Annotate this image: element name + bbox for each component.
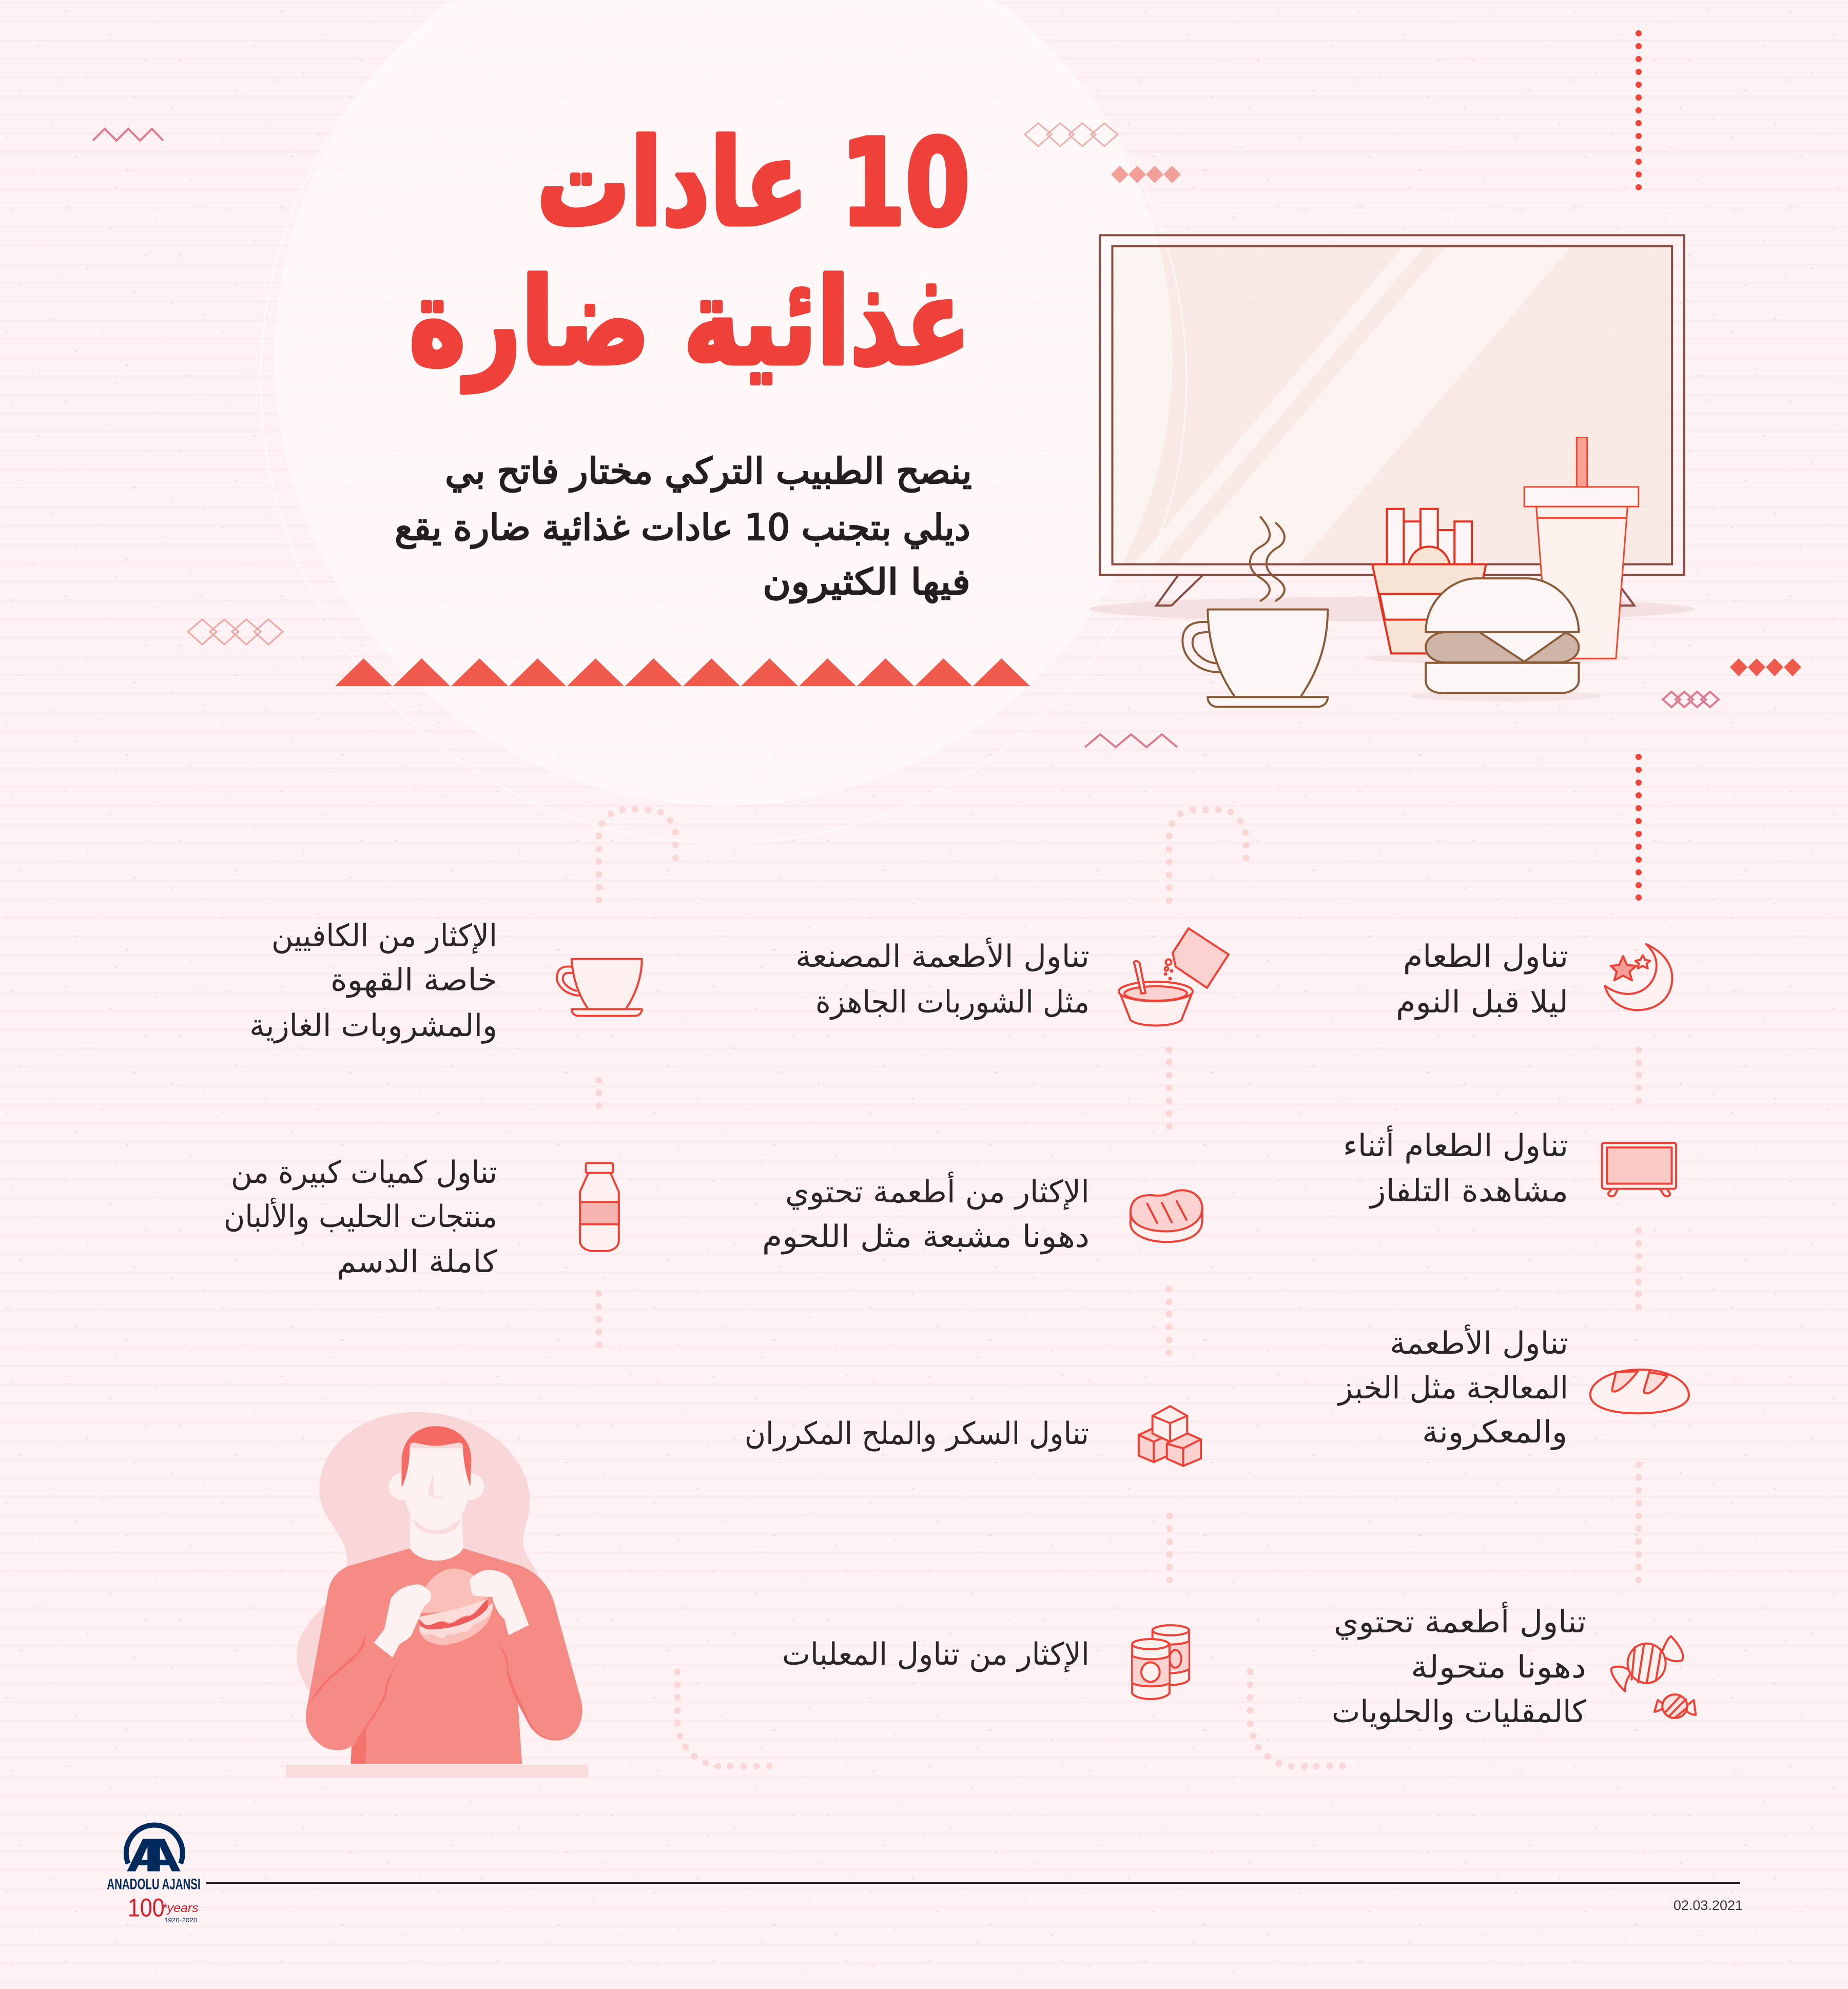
coffee cup [1182, 517, 1328, 707]
dotted connector: left arc [595, 806, 678, 903]
large pale circle behind headline [261, 0, 1186, 843]
habit: trans fats, fried foods and sweets: كالمقليات والحلويات [1332, 1694, 1586, 1730]
habit: trans fats, fried foods and sweets [1332, 1602, 1696, 1730]
icon: moon and stars [1605, 944, 1672, 1010]
icon: milk bottle [580, 1163, 619, 1251]
illustration: tv with snacks [1100, 235, 1684, 707]
habit: processed foods and ready soups [795, 928, 1229, 1025]
date: 02.03.2021 [1674, 1898, 1743, 1913]
triangle row [335, 658, 1030, 686]
100 years mark: 100 [128, 1893, 165, 1922]
tv frame [1100, 235, 1684, 606]
habit: eating while watching tv: مشاهدة التلفاز [1369, 1173, 1568, 1209]
head and neck [388, 1426, 484, 1561]
intro paragraph [395, 450, 972, 603]
intro paragraph: فيها الكثيرون [763, 561, 970, 603]
habit: too much caffeine: خاصة القهوة [330, 962, 497, 998]
logo letters [127, 1839, 181, 1871]
habit: too much caffeine [249, 918, 642, 1044]
zigzag top left [93, 129, 163, 141]
zigzag lower right [1085, 734, 1177, 747]
habit: processed foods and ready soups: مثل الشوربات الجاهزة [815, 984, 1090, 1020]
dotted connector: middle arc [1166, 807, 1249, 904]
habit: full-fat dairy: تناول كميات كبيرة من [231, 1155, 497, 1191]
drink cup [1524, 437, 1639, 658]
logo arc [126, 1825, 183, 1864]
100 years mark: 1920-2020 [164, 1917, 198, 1924]
french fries [1372, 509, 1486, 653]
dotted connector: bottom right corner [1247, 1669, 1346, 1769]
icon: candies [1611, 1636, 1696, 1718]
habit: eating while watching tv: تناول الطعام أثناء [1343, 1125, 1568, 1164]
100 years mark [128, 1893, 199, 1924]
habit: full-fat dairy [224, 1155, 619, 1280]
habit: refined sugar and salt: تناول السكر والملح المكرران [745, 1416, 1089, 1452]
icon: sugar cubes [1139, 1406, 1201, 1466]
sleeve shading [309, 1625, 561, 1764]
outline diamonds right [1663, 692, 1719, 707]
intro paragraph: ديلي بتجنب 10 عادات غذائية ضارة يقع [395, 506, 970, 549]
habit: eating while watching tv [1343, 1125, 1676, 1209]
habit: saturated fats such as meat: الإكثار من أطعمة تحتوي [785, 1172, 1090, 1210]
habit: processed foods such as bread and pasta: المعالجة مثل الخبز [1337, 1370, 1568, 1406]
habit: saturated fats such as meat [762, 1172, 1202, 1255]
icon: cans [1132, 1625, 1189, 1699]
icon: steak [1131, 1190, 1202, 1242]
habit: eating late at night: ليلا قبل النوم [1396, 984, 1568, 1020]
habit: saturated fats such as meat: دهونا مشبعة مثل اللحوم [762, 1219, 1090, 1255]
habit: trans fats, fried foods and sweets: دهونا متحولة [1411, 1649, 1586, 1685]
habit: processed foods such as bread and pasta: والمعكرونة [1422, 1414, 1567, 1450]
filled diamonds right [1730, 658, 1801, 676]
icon: cup [557, 959, 642, 1016]
habit: processed foods and ready soups: تناول الأطعمة المصنعة [795, 938, 1090, 974]
title: 10 عادات [537, 114, 970, 252]
illustration: man eating a burger [297, 1412, 582, 1764]
habit: eating late at night: تناول الطعام [1403, 939, 1568, 974]
red dotted line middle [1636, 754, 1642, 901]
habit: refined sugar and salt [745, 1406, 1201, 1466]
outline diamonds left [188, 619, 283, 645]
hamburger [1426, 578, 1579, 693]
hands [374, 1570, 529, 1658]
footer rule [206, 1882, 1740, 1884]
icon: small tv [1602, 1143, 1676, 1196]
habit: too much caffeine: والمشروبات الغازية [249, 1008, 497, 1044]
background blob [297, 1412, 544, 1707]
red dotted line top [1636, 30, 1642, 190]
icon: soup bowl with packet [1119, 928, 1229, 1025]
habit: processed foods such as bread and pasta: تناول الأطعمة [1390, 1324, 1568, 1361]
tv screen fill [1112, 246, 1672, 564]
habit: processed foods such as bread and pasta [1337, 1324, 1689, 1450]
habit: canned foods: الإكثار من تناول المعلبات [782, 1636, 1090, 1672]
100 years mark: *years [162, 1901, 199, 1915]
wordmark: ANADOLU AJANSI [107, 1876, 201, 1893]
habit: full-fat dairy: منتجات الحليب والألبان [224, 1198, 497, 1235]
dotted connector: bottom left corner [674, 1669, 773, 1769]
title: غذائية ضارة [409, 253, 971, 393]
habit: eating late at night [1396, 939, 1672, 1020]
burger [415, 1568, 493, 1645]
filled diamonds top [1111, 166, 1181, 183]
habit: canned foods [782, 1625, 1189, 1699]
habit: full-fat dairy: كاملة الدسم [337, 1244, 497, 1280]
shadows under tv scene [1089, 597, 1695, 701]
intro paragraph: ينصح الطبيب التركي مختار فاتح بي [445, 450, 972, 493]
habit: too much caffeine: الإكثار من الكافيين [271, 918, 497, 954]
outline diamonds top [1025, 123, 1118, 146]
title [409, 114, 971, 393]
dotted connectors: column segments [595, 1047, 1642, 1584]
torso and arms [306, 1548, 582, 1764]
icon: bread [1590, 1370, 1689, 1413]
logo: Anadolu Ajansi [107, 1825, 201, 1924]
habit: trans fats, fried foods and sweets: تناول أطعمة تحتوي [1334, 1602, 1586, 1640]
counter bar under the man [286, 1765, 588, 1778]
